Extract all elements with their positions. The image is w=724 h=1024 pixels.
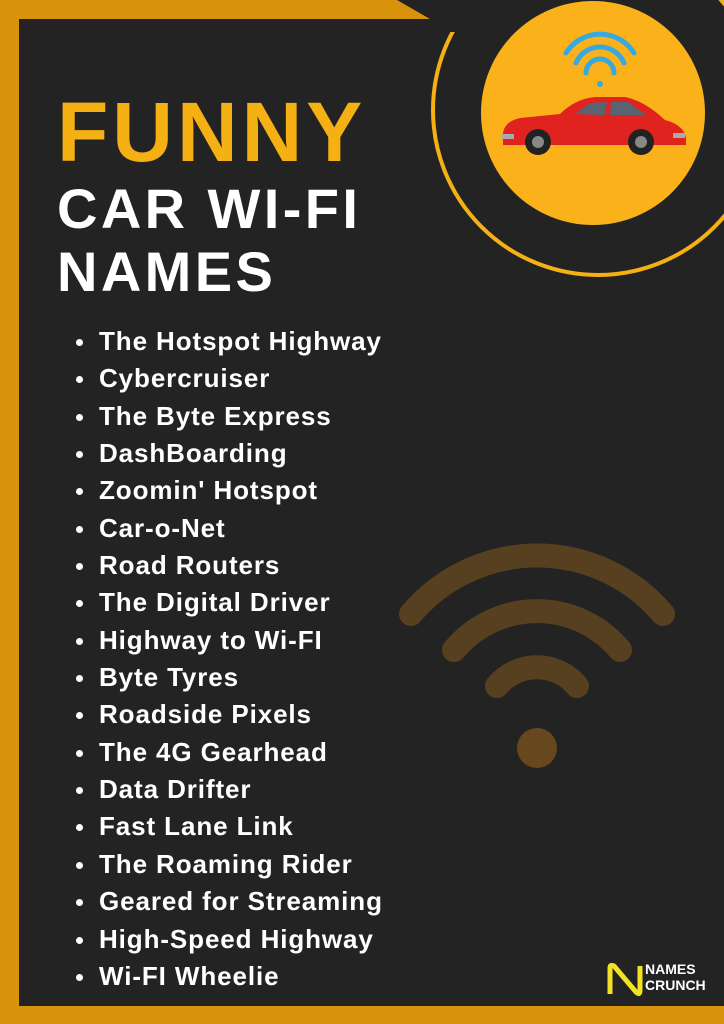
list of names: Wi-FI Wheelie	[99, 961, 279, 991]
list of names: The Byte Express	[99, 401, 332, 431]
list of names: Road Routers	[99, 550, 280, 580]
list of names: DashBoarding	[99, 438, 287, 468]
icon: red car	[502, 97, 686, 155]
list of names: Highway to Wi-FI	[99, 625, 323, 655]
title: CAR WI-FI NAMES: NAMES	[57, 240, 276, 303]
list of names: The 4G Gearhead	[99, 737, 328, 767]
title: CAR WI-FI NAMES: CAR WI-FI	[57, 177, 361, 240]
list of names: Fast Lane Link	[99, 811, 294, 841]
list of names: High-Speed Highway	[99, 924, 374, 954]
list of names: The Hotspot Highway	[99, 326, 382, 356]
list of names: Car-o-Net	[99, 513, 226, 543]
title: CAR WI-FI NAMES	[57, 177, 361, 303]
logo: Names Crunch	[608, 961, 706, 996]
list of names: Roadside Pixels	[99, 699, 312, 729]
decorative faded wifi	[399, 544, 675, 768]
list of names: Geared for Streaming	[99, 886, 383, 916]
list of names: Cybercruiser	[99, 363, 270, 393]
title: FUNNY: FUNNY	[57, 85, 366, 179]
logo: Names Crunch: CRUNCH	[645, 977, 706, 993]
logo: Names Crunch: NAMES	[645, 961, 696, 977]
icon: blue wifi	[566, 34, 634, 87]
list of names: Data Drifter	[99, 774, 251, 804]
list of names: Zoomin' Hotspot	[99, 475, 318, 505]
list of names	[76, 326, 383, 991]
icon: yellow circle with car and wifi	[481, 1, 705, 225]
list of names: The Roaming Rider	[99, 849, 353, 879]
list of names: Byte Tyres	[99, 662, 239, 692]
list of names: The Digital Driver	[99, 587, 330, 617]
